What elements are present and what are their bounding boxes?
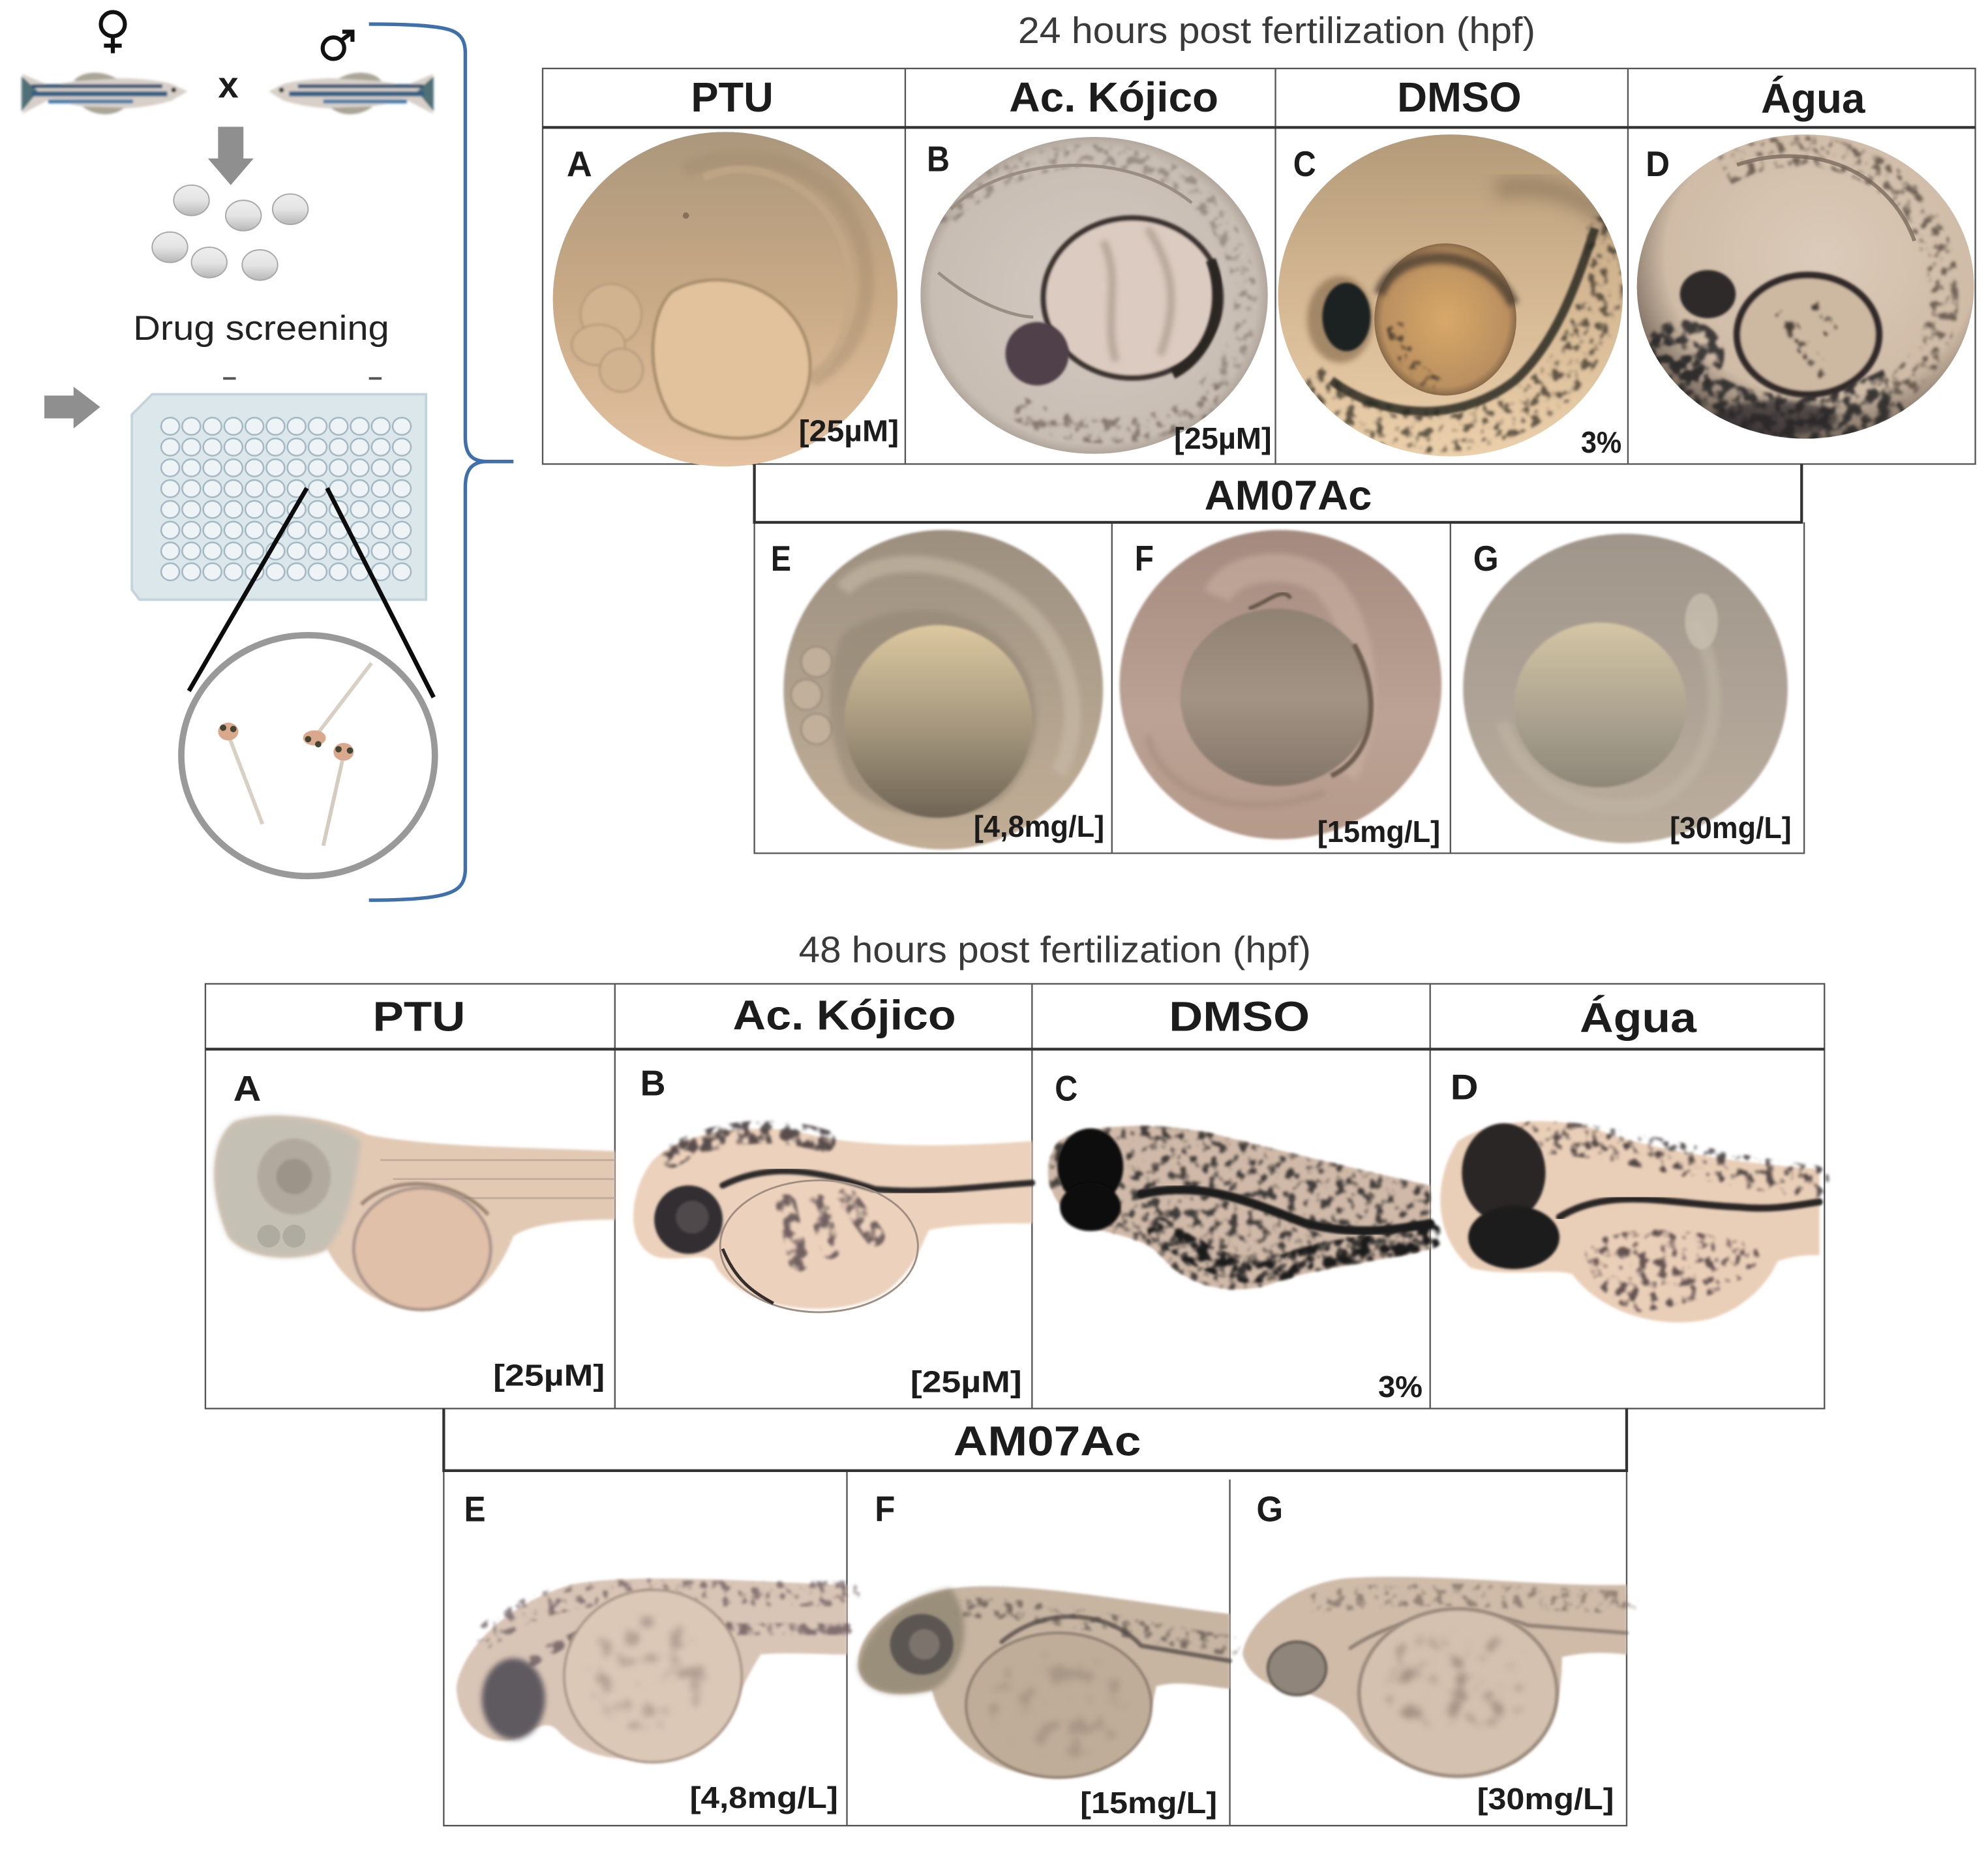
embryo F: 15 mg/L 24 hpf bbox=[1119, 530, 1441, 839]
embryo D: water 24 hpf bbox=[1637, 134, 1974, 439]
label: C: C bbox=[1293, 144, 1316, 184]
larva G: 30 mg/L 48 hpf bbox=[1242, 1577, 1627, 1776]
zoom lines bbox=[189, 488, 434, 697]
panel: 48 hpf bbox=[205, 929, 1824, 1826]
header: AM07Ac: AM07Ac bbox=[1205, 472, 1372, 519]
header: DMSO: DMSO bbox=[1169, 993, 1310, 1040]
concentration: E: [4,8mg/L] bbox=[689, 1781, 838, 1814]
concentration: F: [15mg/L] bbox=[1318, 815, 1440, 849]
concentration: B: [25µM] bbox=[911, 1364, 1022, 1398]
label: A: A bbox=[567, 144, 592, 184]
label: E: E bbox=[464, 1490, 486, 1529]
concentration: C: 3% bbox=[1378, 1370, 1423, 1404]
title: 24 hpf: 24 hours post fertilization (hpf) bbox=[1018, 10, 1535, 51]
larva C: DMSO 48 hpf bbox=[1048, 1126, 1430, 1289]
header: Ac. Kojico: Ac. Kójico bbox=[1009, 74, 1218, 121]
icon: female symbol bbox=[101, 12, 125, 53]
embryo B: kojic acid 24 hpf bbox=[920, 137, 1268, 454]
larva B: kojic acid 48 hpf bbox=[633, 1128, 1032, 1312]
table: 48 hpf controls bbox=[205, 984, 1824, 1409]
embryo A: PTU 24 hpf bbox=[553, 132, 897, 466]
icon: well close-up with larvae bbox=[181, 635, 435, 876]
concentration: F: [15mg/L] bbox=[1080, 1786, 1217, 1820]
label: A: A bbox=[233, 1068, 261, 1108]
cross symbol: x bbox=[218, 65, 239, 106]
icon: male symbol bbox=[323, 32, 352, 59]
larva A: PTU 48 hpf bbox=[215, 1116, 615, 1310]
larva E: 4.8 mg/L 48 hpf bbox=[457, 1578, 847, 1762]
table: 24 hpf AM07Ac bbox=[755, 464, 1804, 853]
embryo C: DMSO 24 hpf bbox=[1278, 134, 1623, 457]
concentration: G: [30mg/L] bbox=[1670, 811, 1792, 845]
concentration: B: [25µM] bbox=[1174, 421, 1272, 455]
header: AM07Ac: AM07Ac bbox=[954, 1418, 1141, 1465]
bracket bbox=[369, 24, 513, 900]
label: drug screening: Drug screening bbox=[133, 309, 389, 348]
header: Agua: Água bbox=[1761, 75, 1866, 122]
icon: eggs bbox=[152, 185, 308, 280]
panel: 24 hpf bbox=[543, 10, 1976, 853]
larva D: water 48 hpf bbox=[1440, 1121, 1819, 1323]
table: 24 hpf controls bbox=[543, 68, 1976, 464]
label: B: B bbox=[640, 1064, 666, 1104]
header: PTU: PTU bbox=[691, 74, 774, 121]
label: D: D bbox=[1451, 1067, 1479, 1107]
concentration: E: [4,8mg/L] bbox=[974, 809, 1104, 843]
table: 48 hpf AM07Ac bbox=[444, 1409, 1627, 1826]
larva F: 15 mg/L 48 hpf bbox=[858, 1586, 1230, 1778]
label: C: C bbox=[1055, 1068, 1077, 1108]
label: G: G bbox=[1256, 1490, 1283, 1529]
arrow: right bbox=[44, 387, 100, 428]
label: F: F bbox=[1135, 539, 1154, 579]
icon: male zebrafish bbox=[269, 72, 434, 114]
concentration: A: [25µM] bbox=[799, 413, 899, 447]
concentration: G: [30mg/L] bbox=[1477, 1782, 1614, 1816]
panel: experimental workflow bbox=[22, 12, 513, 900]
label: D: D bbox=[1646, 144, 1670, 184]
title: 48 hpf: 48 hours post fertilization (hpf) bbox=[799, 929, 1311, 970]
embryo G: 30 mg/L 24 hpf bbox=[1463, 534, 1788, 843]
concentration: A: [25µM] bbox=[493, 1359, 605, 1392]
label: G: G bbox=[1473, 539, 1499, 579]
label: F: F bbox=[875, 1490, 895, 1529]
icon: 96-well plate bbox=[132, 377, 426, 599]
header: Ac. Kojico: Ac. Kójico bbox=[733, 991, 956, 1038]
arrow: down bbox=[208, 127, 254, 185]
label: E: E bbox=[771, 539, 791, 579]
concentration: C: 3% bbox=[1581, 425, 1621, 459]
header: Agua: Água bbox=[1580, 994, 1697, 1041]
header: DMSO: DMSO bbox=[1397, 74, 1522, 121]
label: B: B bbox=[927, 139, 950, 179]
header: PTU: PTU bbox=[373, 993, 465, 1040]
icon: female zebrafish bbox=[22, 72, 188, 114]
embryo E: 4.8 mg/L 24 hpf bbox=[783, 530, 1103, 849]
